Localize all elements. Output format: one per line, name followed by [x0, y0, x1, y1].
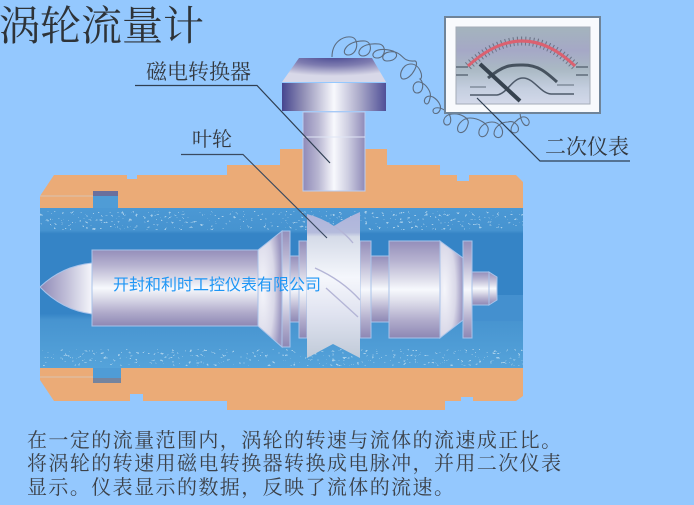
label: magnetic converter: 磁电转换器 [146, 60, 251, 84]
watermark text: 开封和利时工控仪表有限公司 [113, 276, 321, 294]
label: secondary meter [477, 98, 630, 161]
coil wire [332, 37, 529, 138]
label: impeller [181, 128, 327, 238]
description text: 在一定的流量范围内，涡轮的转速与流体的流速成正比。 [27, 429, 562, 452]
front flanges [282, 231, 290, 347]
label: secondary meter: 二次仪表 [545, 135, 629, 159]
description text: 将涡轮的转速用磁电转换器转换成电脉冲，并用二次仪表 [27, 452, 562, 475]
rotor shaft assembly [40, 231, 497, 347]
front cone [258, 231, 282, 347]
secondary meter [445, 17, 600, 113]
magnetic converter [282, 58, 386, 191]
impeller [307, 212, 360, 358]
pipe body [40, 149, 523, 410]
label: magnetic converter [135, 60, 330, 163]
nose cone [40, 263, 92, 314]
description text: 显示。仪表显示的数据，反映了流体的流速。 [27, 476, 455, 499]
rear flanges and body [360, 241, 371, 338]
title: 涡轮流量计 [0, 3, 204, 49]
description text [27, 429, 562, 499]
label: impeller: 叶轮 [192, 128, 232, 151]
flow channel water [40, 191, 523, 383]
front body [92, 250, 258, 326]
